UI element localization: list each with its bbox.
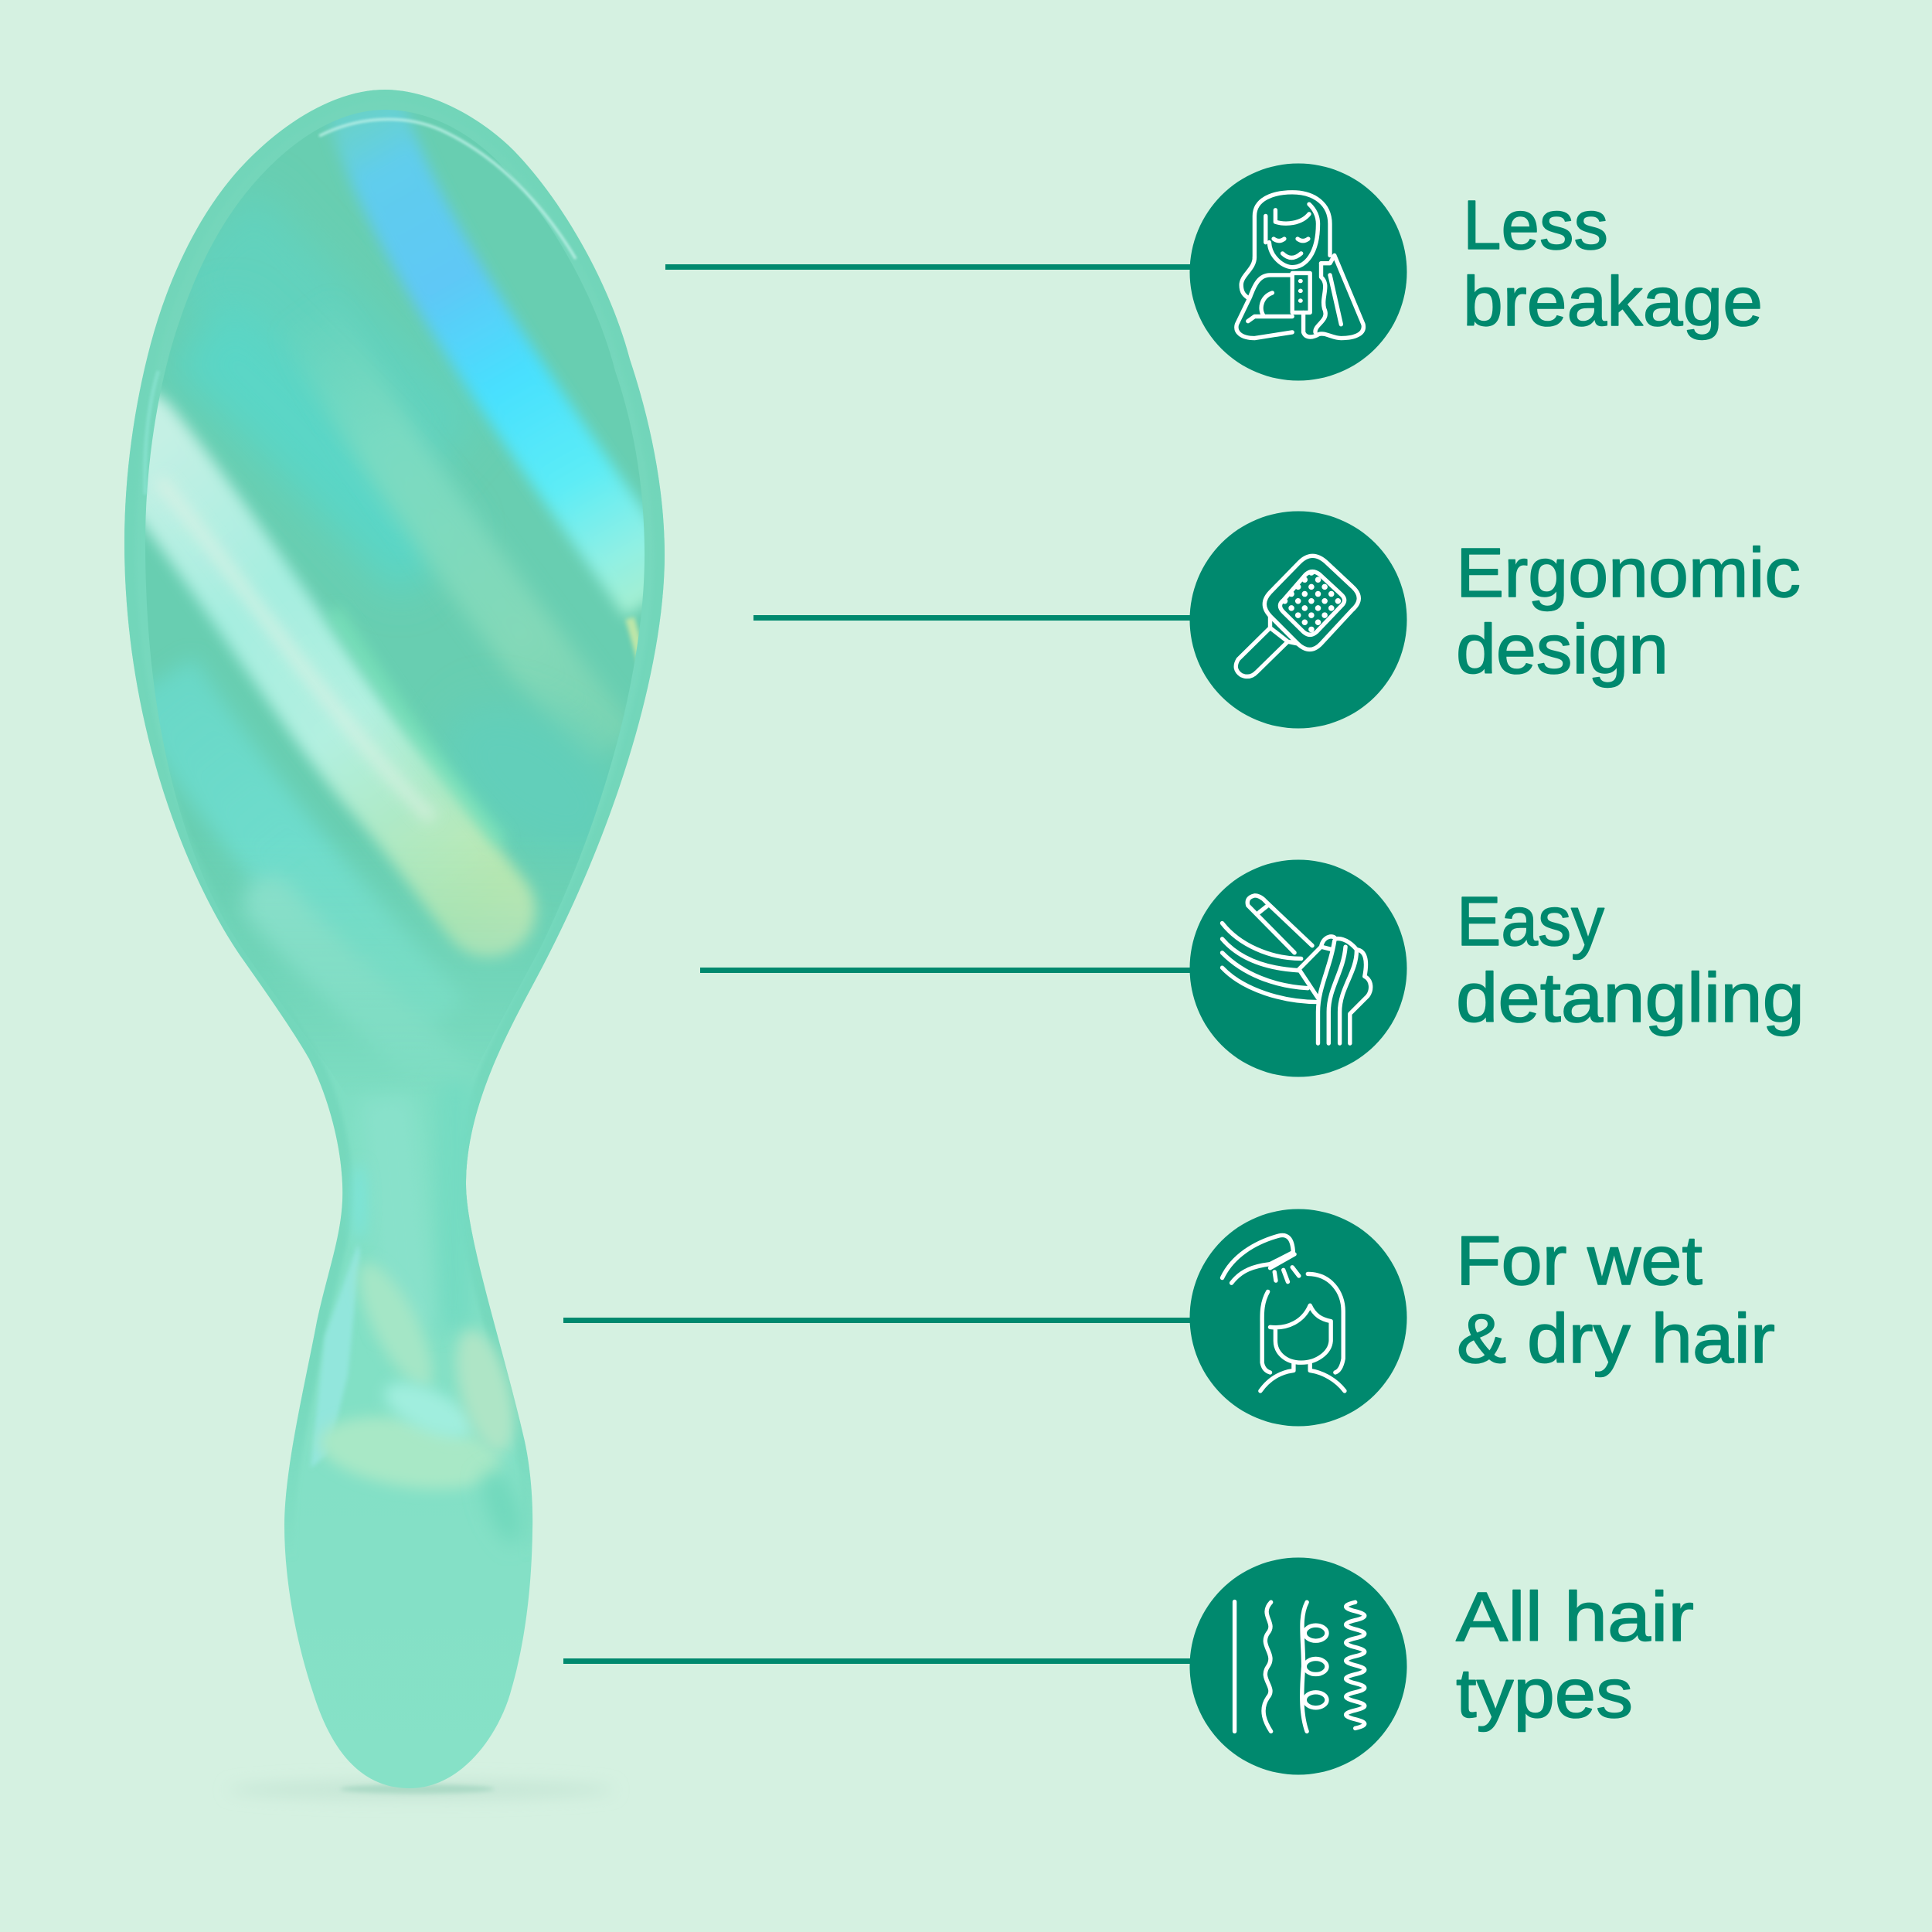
label 3	[1456, 883, 1804, 1037]
hair brush	[116, 77, 672, 1788]
label 1: breakage	[1463, 264, 1763, 341]
leader line 1	[665, 264, 1195, 270]
badge 4	[1190, 1209, 1406, 1427]
leader line 5	[563, 1658, 1195, 1664]
label 5: types	[1456, 1655, 1633, 1733]
leader line 2	[753, 615, 1194, 621]
icon: shower over head	[1223, 1235, 1345, 1391]
callout 1: less breakage	[665, 164, 1763, 380]
icon: paddle brush	[1236, 556, 1359, 676]
leader line 4	[563, 1318, 1195, 1323]
badge 5	[1190, 1558, 1406, 1774]
icon: hand detangling hair	[1223, 896, 1371, 1043]
callout 2: ergonomic design	[753, 512, 1801, 728]
label 2: Ergonomic	[1456, 535, 1801, 612]
label 1: Less	[1463, 187, 1608, 264]
icon: woman brushing hair	[1236, 192, 1363, 338]
badge 2	[1190, 512, 1406, 728]
label 4: & dry hair	[1457, 1301, 1775, 1378]
callout 5: all hair types	[563, 1558, 1694, 1774]
brush head gloss highlights	[319, 119, 576, 259]
label 3: Easy	[1457, 883, 1604, 961]
label 5	[1456, 1579, 1694, 1733]
badge 3	[1190, 859, 1406, 1077]
badge 1	[1190, 164, 1406, 380]
label 4: For wet	[1456, 1223, 1702, 1300]
icon: straight, wavy, curly and coily strands	[1235, 1602, 1365, 1731]
label 4	[1456, 1223, 1775, 1378]
brush head pad with holographic bands	[145, 110, 645, 995]
label 3: detangling	[1456, 960, 1804, 1037]
brush edge rim	[124, 90, 665, 1490]
label 1	[1463, 187, 1763, 341]
label 2: design	[1456, 611, 1668, 689]
callout 4: for wet and dry hair	[563, 1209, 1775, 1427]
label 5: All hair	[1456, 1579, 1694, 1656]
leader line 3	[700, 968, 1195, 973]
callout 3: easy detangling	[700, 859, 1804, 1077]
label 2	[1456, 535, 1801, 689]
brush ground shadow	[228, 1781, 614, 1799]
handle reflections	[452, 1082, 456, 1329]
